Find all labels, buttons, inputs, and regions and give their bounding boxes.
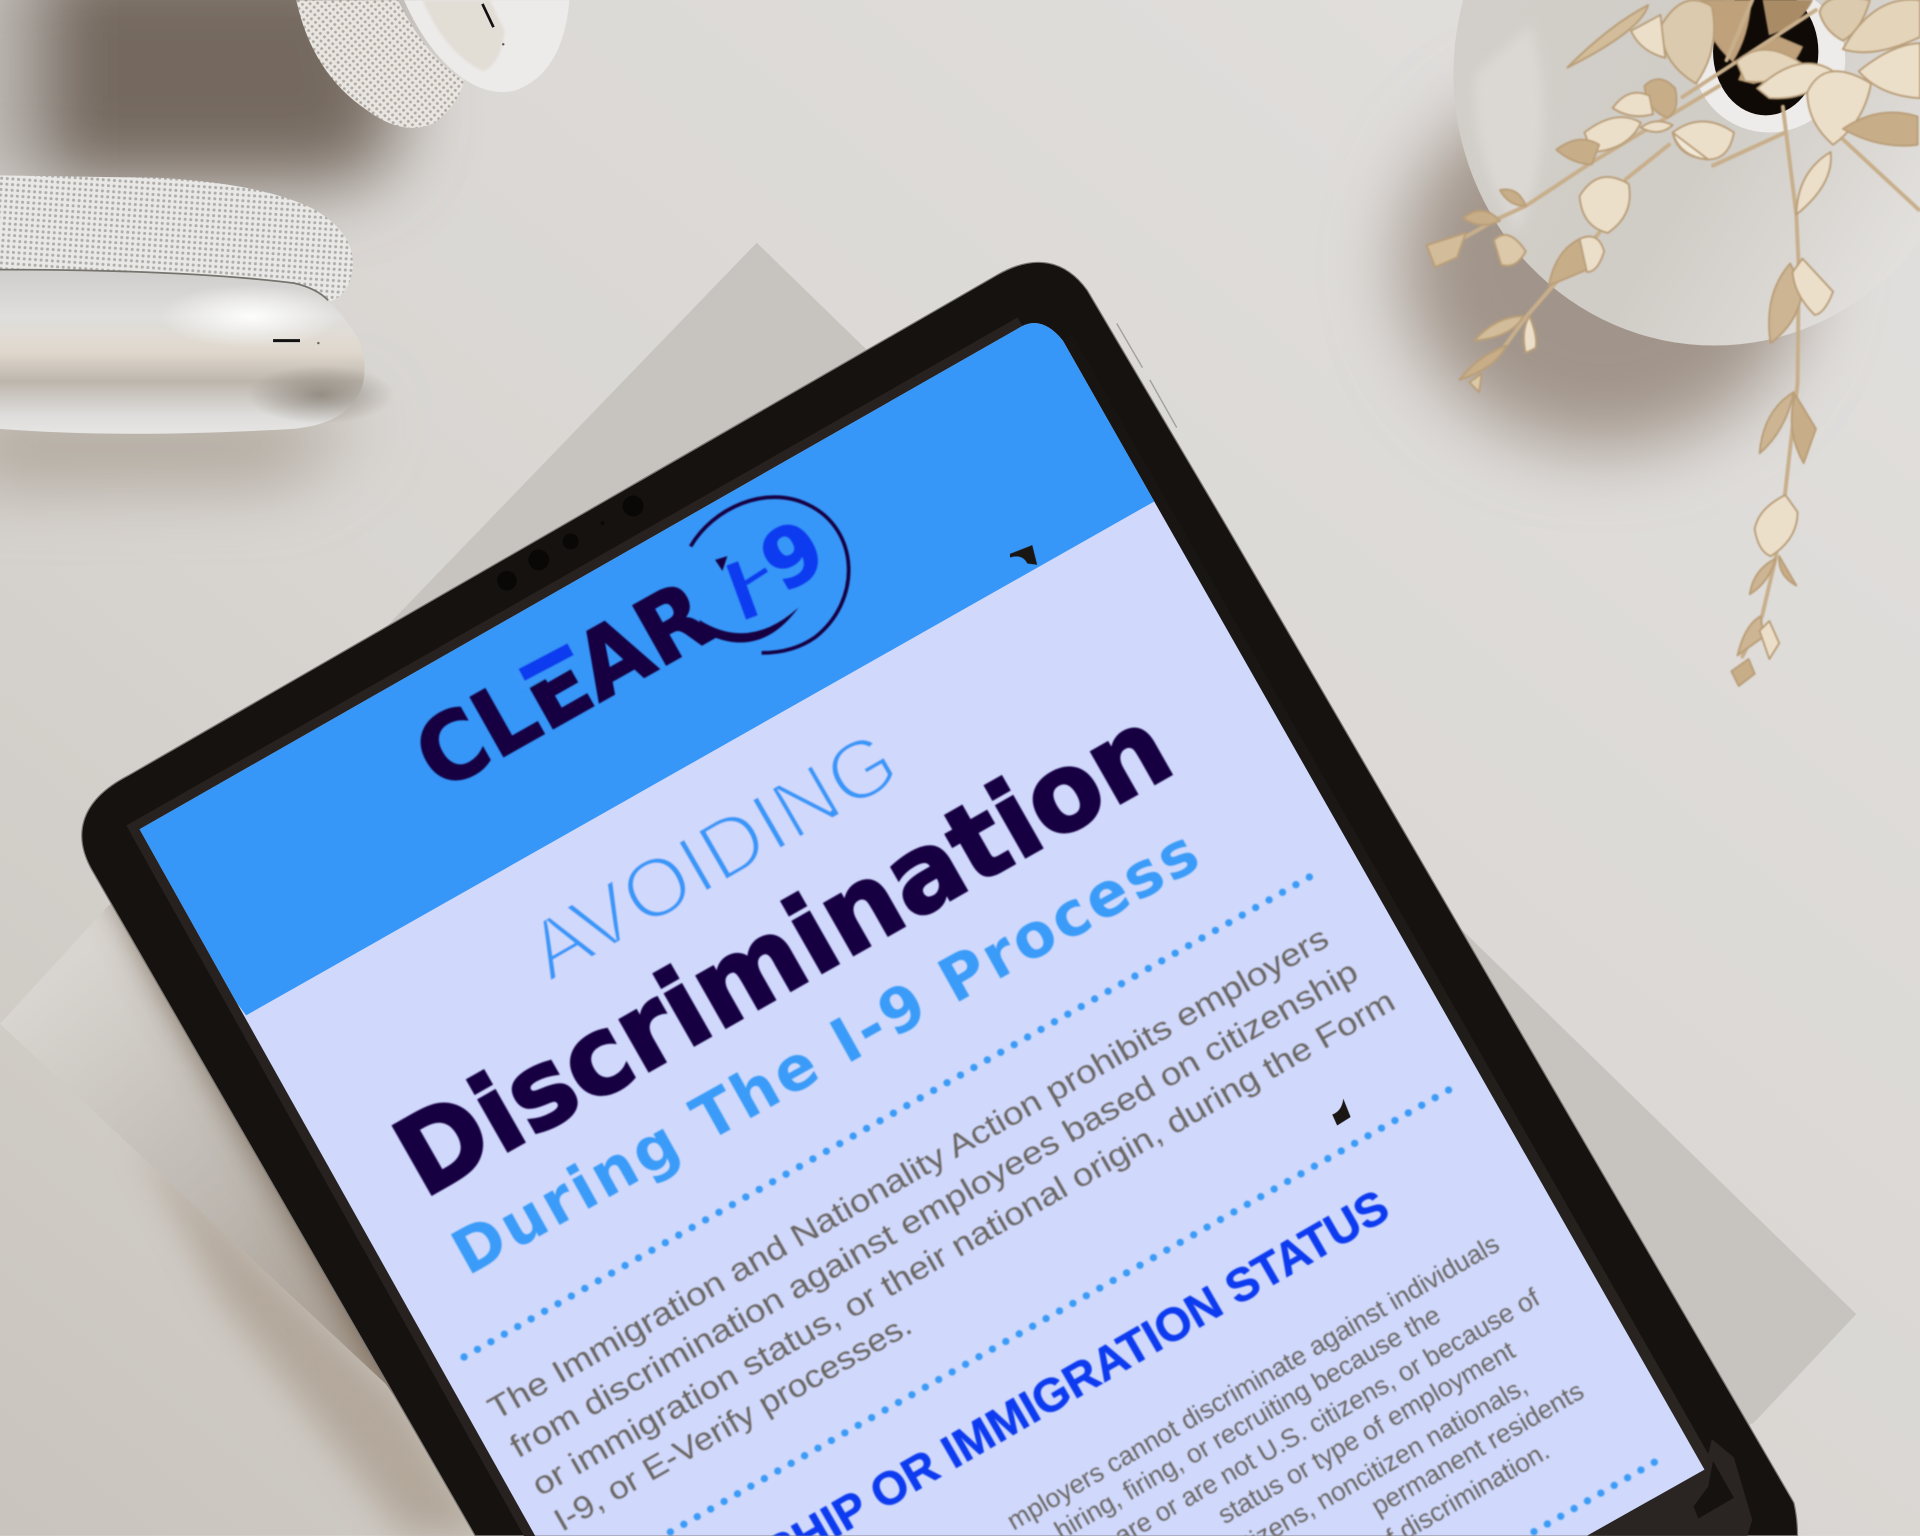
leaves over pot opening: [1700, 0, 1812, 84]
vase: [1453, 0, 1920, 346]
logo wordmark: CLEAR: [397, 560, 730, 812]
logo letter i: [732, 564, 752, 617]
black speck upper: [1010, 545, 1037, 565]
section paragraph: permanent residents: [1366, 1375, 1589, 1521]
paper sheet under tablet: [388, 243, 1856, 1536]
logo swoosh outer: [691, 497, 849, 653]
vase shadow: [1402, 80, 1806, 447]
dried plant: [1427, 0, 1920, 686]
plant leaves: [1427, 0, 1920, 686]
title: avoiding: AVOIDING: [512, 713, 913, 998]
intro paragraph: from discrimination against employees based on citizenship: [504, 953, 1364, 1465]
dotted divider 2: [664, 1090, 1449, 1536]
tablet screen: [140, 323, 1704, 1536]
headphone cast shadow: [0, 0, 404, 478]
logo hyphen: [746, 570, 767, 583]
upper metal cup: [404, 0, 569, 92]
camera dots: [497, 496, 643, 590]
subtitle: During The I-9 Process: [440, 816, 1210, 1289]
tablet shadow on sheet: [100, 904, 394, 1395]
logo blue bar: [522, 649, 571, 675]
inner bezel band right: [1063, 341, 1704, 1470]
corner notch: [1693, 1461, 1734, 1519]
upper ear cushion: [296, 0, 464, 128]
logo: Clear I-9: [420, 494, 852, 782]
screen page background: [122, 306, 1714, 1536]
logo blue bar mask: [517, 650, 573, 682]
tablet: [73, 208, 1798, 1536]
black speck lower: [1332, 1099, 1351, 1126]
intro paragraph: [482, 919, 1401, 1536]
section paragraph: status or type of employment: [1213, 1335, 1521, 1530]
lower paper sheet: [0, 784, 637, 1536]
lower paper shadow: [135, 1133, 490, 1536]
dotted divider 1: [464, 870, 1322, 1357]
intro paragraph: or immigration status, or their national origin, during the Form: [526, 982, 1401, 1503]
blue header band: [140, 323, 1154, 1016]
title: discrimination: Discrimination: [375, 684, 1191, 1222]
logo digit nine: 9: [745, 502, 841, 611]
tablet bezel: [82, 262, 1798, 1536]
headphones: [0, 0, 569, 434]
plant stems: [1442, 0, 1919, 657]
dotted divider 3: [1527, 1462, 1654, 1536]
section paragraph: mployers cannot discriminate against individuals: [1002, 1228, 1504, 1536]
intro paragraph: I-9, or E-Verify processes.: [548, 1306, 918, 1536]
lower metal cup: [0, 270, 394, 434]
logo swoosh inner: [699, 608, 798, 642]
inner bezel band top and left: [140, 326, 1022, 1536]
bezel bottom corner: [1587, 1439, 1752, 1536]
lower ear cushion: [0, 175, 353, 301]
tablet side buttons: [1117, 324, 1177, 428]
intro paragraph: The Immigration and Nationality Action prohibits employers: [482, 919, 1334, 1427]
logo i accent: [715, 556, 727, 571]
